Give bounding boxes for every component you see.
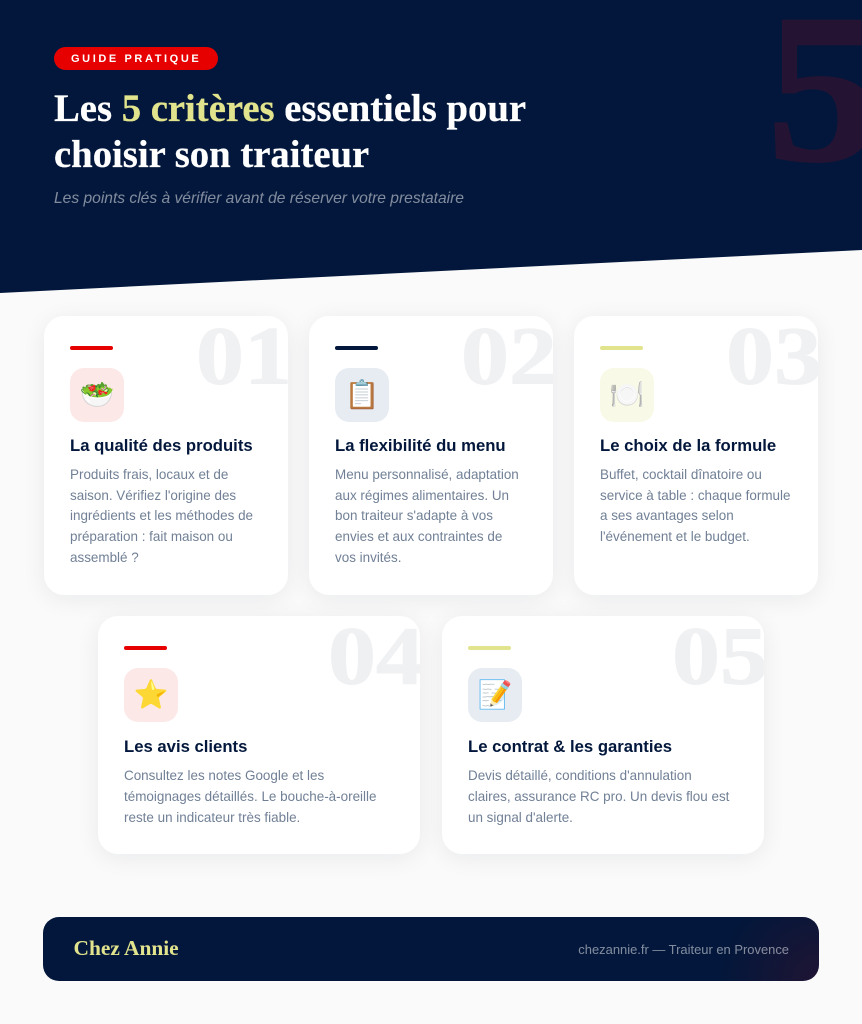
badge: guide pratique xyxy=(54,47,218,70)
icon: plate and cutlery xyxy=(600,368,654,422)
card text: un signal d'alerte. xyxy=(468,810,573,825)
title: Les 5 critères essentiels pour xyxy=(54,88,526,130)
icon: star xyxy=(124,668,178,722)
title xyxy=(54,94,526,168)
brand name: Chez Annie xyxy=(74,936,179,960)
icon: star: ⭐ xyxy=(134,678,168,711)
panel: card 02 flexibility xyxy=(309,316,553,595)
icon: memo xyxy=(468,668,522,722)
badge: guide pratique: GUIDE PRATIQUE xyxy=(71,52,201,64)
card text xyxy=(335,467,519,565)
accent bar xyxy=(468,646,511,650)
accent bar xyxy=(124,646,167,650)
panel: header xyxy=(0,0,862,294)
card text: préparation : fait maison ou xyxy=(70,529,233,544)
accent bar xyxy=(70,346,113,350)
icon: salad xyxy=(70,368,124,422)
card text xyxy=(70,467,253,565)
title: choisir son traiteur xyxy=(54,134,369,176)
card heading: Les avis clients xyxy=(124,736,247,756)
card heading: La qualité des produits xyxy=(70,436,253,455)
accent bar xyxy=(600,346,643,350)
card text: Buffet, cocktail dînatoire ou xyxy=(600,467,762,482)
accent bar xyxy=(335,346,378,350)
panel: footer xyxy=(43,917,819,981)
card text: reste un indicateur très fiable. xyxy=(124,810,300,825)
icon: plate and cutlery: 🍽️ xyxy=(610,378,644,411)
card text: Menu personnalisé, adaptation xyxy=(335,467,519,482)
card text: saison. Vérifiez l'origine des xyxy=(70,488,236,502)
card text xyxy=(600,467,790,544)
icon: clipboard xyxy=(335,368,389,422)
card heading: Le contrat & les garanties xyxy=(468,736,672,756)
card text: a ses avantages selon xyxy=(600,508,734,523)
card text: témoignages détaillés. Le bouche-à-oreille xyxy=(124,789,376,804)
panel: card 01 quality xyxy=(44,316,288,595)
panel: card 05 contract xyxy=(442,616,764,854)
panel: card 03 formula xyxy=(574,316,818,595)
panel: card 04 reviews xyxy=(98,616,420,854)
icon: memo: 📝 xyxy=(478,678,512,711)
card text: vos invités. xyxy=(335,550,401,565)
card heading: La flexibilité du menu xyxy=(335,436,506,455)
icon: clipboard: 📋 xyxy=(345,378,379,411)
card text: ingrédients et les méthodes de xyxy=(70,508,253,523)
card text: claires, assurance RC pro. Un devis flou est xyxy=(468,789,729,804)
card text: Devis détaillé, conditions d'annulation xyxy=(468,768,692,783)
card text: l'événement et le budget. xyxy=(600,529,750,544)
card text: aux régimes alimentaires. Un xyxy=(335,488,509,502)
card text: service à table : chaque formule xyxy=(600,488,790,502)
card text xyxy=(124,768,376,825)
site and tagline: chezannie.fr — Traiteur en Provence xyxy=(578,942,789,957)
card text: Produits frais, locaux et de xyxy=(70,467,228,482)
card text xyxy=(468,768,730,825)
card text: assemblé ? xyxy=(70,550,139,565)
card heading: Le choix de la formule xyxy=(600,436,776,455)
card text: Consultez les notes Google et les xyxy=(124,768,324,783)
subtitle: Les points clés à vérifier avant de réserver votre prestataire xyxy=(54,190,464,206)
card text: bon traiteur s'adapte à vos xyxy=(335,508,493,523)
icon: salad: 🥗 xyxy=(80,378,114,411)
card text: envies et aux contraintes de xyxy=(335,529,502,544)
